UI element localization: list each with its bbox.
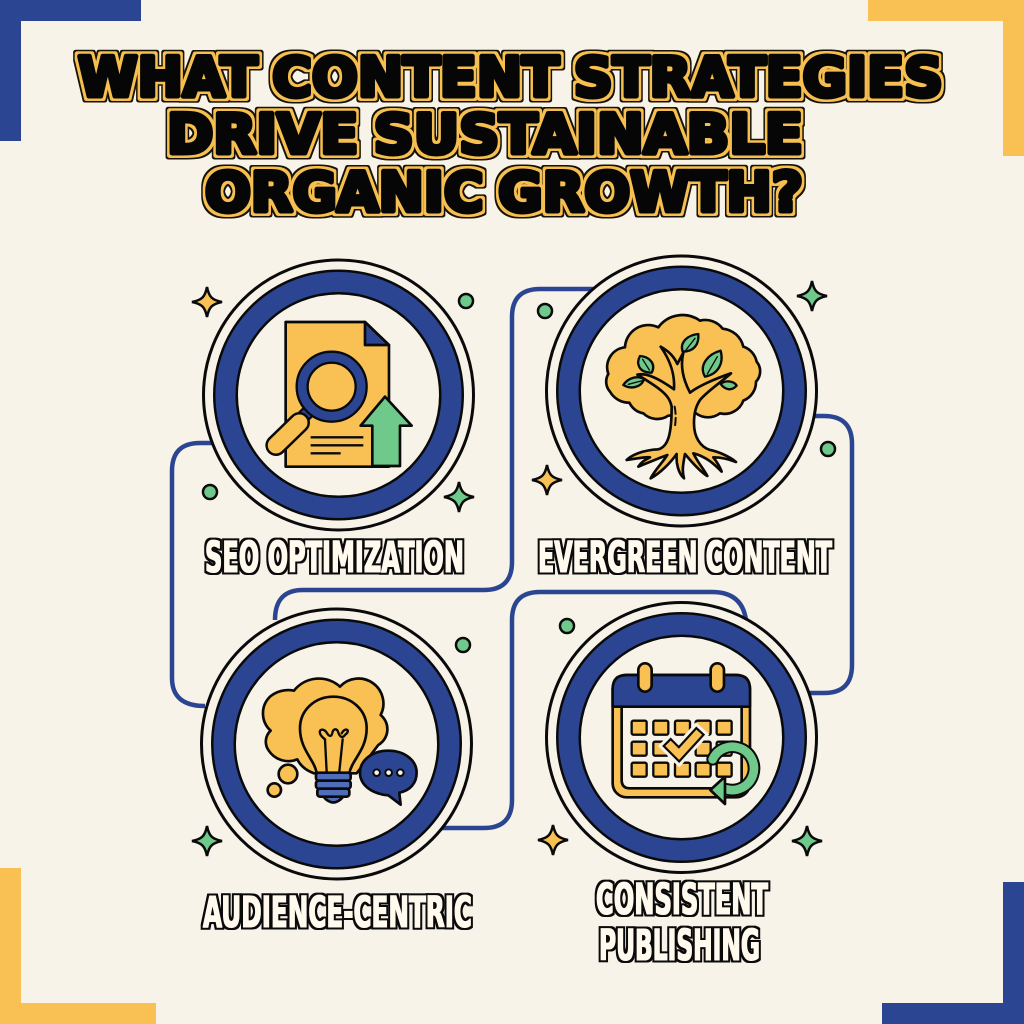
corner accent: bottom left <box>0 868 156 1024</box>
panel: audience-centric <box>192 609 472 938</box>
dot: top left <box>538 304 552 318</box>
sparkle: green <box>792 826 822 856</box>
dot: top left <box>560 619 574 633</box>
connector lines <box>172 289 852 828</box>
title: DRIVE SUSTAINABLE <box>167 103 803 166</box>
sparkle: green <box>444 482 474 512</box>
corner accent: top left <box>0 0 141 141</box>
panel: SEO optimization <box>192 260 474 583</box>
panel: evergreen content <box>532 256 835 583</box>
label: consistent publishing: PUBLISHING <box>599 921 760 971</box>
icon: calendar with check and refresh arrow <box>613 663 754 804</box>
label: consistent publishing: CONSISTENT <box>596 875 768 925</box>
corner accent: bottom right <box>882 882 1024 1024</box>
dot: top right <box>459 294 473 308</box>
sparkle: green <box>192 826 222 856</box>
title: WHAT CONTENT STRATEGIES <box>78 46 943 109</box>
title <box>78 46 943 224</box>
medallion ring <box>202 609 472 879</box>
label: consistent publishing <box>596 875 768 971</box>
label: SEO optimization: SEO OPTIMIZATION <box>205 533 464 583</box>
title: ORGANIC GROWTH? <box>205 161 803 224</box>
dot: right <box>821 442 835 456</box>
sparkle: green <box>797 281 827 311</box>
label: audience-centric: AUDIENCE-CENTRIC <box>203 888 472 938</box>
dot: bottom left <box>203 485 217 499</box>
medallion ring <box>204 260 474 530</box>
medallion ring <box>546 602 816 872</box>
medallion ring <box>546 256 816 526</box>
dot: top right <box>456 638 470 652</box>
icon: tree <box>606 315 760 478</box>
panel: consistent publishing <box>538 602 822 971</box>
icon: document with magnifier and up arrow <box>276 322 412 467</box>
icon: light bulb with thought cloud and speech bubble <box>263 679 417 805</box>
sparkle: yellow <box>532 465 562 495</box>
sparkle: yellow <box>538 825 568 855</box>
sparkle: yellow <box>192 287 222 317</box>
corner accent: top right <box>868 0 1024 156</box>
